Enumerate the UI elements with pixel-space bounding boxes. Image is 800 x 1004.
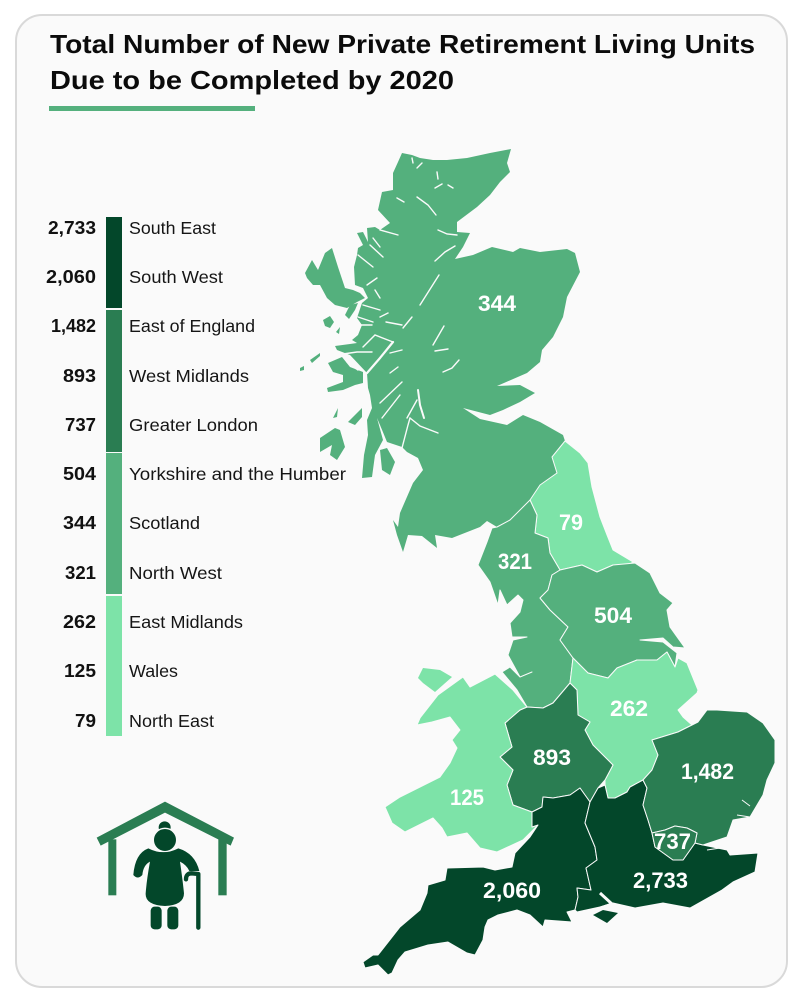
map values: 1,482	[681, 759, 734, 784]
map values: 737	[654, 829, 691, 854]
map region: East of England	[643, 710, 775, 845]
legend values: 125	[64, 661, 96, 681]
legend values: 893	[63, 366, 96, 386]
legend values: 321	[65, 563, 96, 583]
legend region names: Greater London	[129, 415, 258, 435]
map values: 504	[594, 603, 633, 628]
icon: woman with cane	[133, 821, 199, 929]
icon: roof and pillars	[97, 802, 234, 895]
Arran	[380, 448, 395, 475]
legend colour bar	[106, 217, 122, 736]
legend region names: Scotland	[129, 513, 200, 533]
Thames and east coast inlets	[707, 800, 750, 850]
Islay	[320, 428, 345, 460]
Skye	[305, 248, 365, 308]
legend region names	[129, 218, 346, 731]
Mull	[327, 357, 363, 392]
legend region names: Wales	[129, 661, 178, 681]
map region: South West	[363, 788, 597, 975]
legend values: 1,482	[51, 316, 96, 336]
map values: 2,060	[483, 878, 541, 903]
legend	[46, 217, 346, 736]
Jura	[348, 408, 362, 425]
Solent inlet	[592, 893, 612, 911]
map region: North East	[530, 441, 633, 572]
map values: 344	[478, 291, 517, 316]
legend values	[46, 218, 96, 731]
map region: South East	[575, 780, 758, 923]
title	[50, 29, 755, 95]
Scottish lochs	[343, 158, 459, 448]
legend values: 79	[75, 711, 96, 731]
map region: Scotland	[300, 149, 580, 552]
legend region names: North East	[129, 711, 214, 731]
map values: 2,733	[633, 868, 688, 893]
legend region names: South East	[129, 218, 216, 238]
legend values: 504	[63, 464, 96, 484]
legend region names: East Midlands	[129, 612, 243, 632]
legend region names: West Midlands	[129, 366, 249, 386]
map values: 893	[533, 745, 571, 770]
map region: Wales	[385, 668, 538, 852]
map region: North West	[478, 500, 573, 708]
map region: Yorkshire and the Humber	[540, 563, 685, 678]
legend values: 344	[63, 513, 96, 533]
map of Great Britain	[300, 149, 775, 975]
map values: 262	[610, 696, 648, 721]
map region: Greater London	[652, 826, 697, 860]
legend region names: East of England	[129, 316, 255, 336]
icon: elderly woman under a house roof	[97, 802, 234, 929]
legend values: 737	[65, 415, 96, 435]
legend values: 2,060	[46, 267, 96, 287]
map values: 79	[559, 510, 583, 535]
map values: 321	[498, 549, 532, 574]
legend region names: South West	[129, 267, 223, 287]
map region: West Midlands	[500, 683, 613, 812]
title: Total Number of New Private Retirement Living Units	[50, 29, 755, 59]
legend region names: Yorkshire and the Humber	[129, 464, 346, 484]
title: Due to be Completed by 2020	[50, 65, 454, 95]
map values	[450, 291, 734, 903]
legend region names: North West	[129, 563, 222, 583]
map region: East Midlands	[570, 652, 698, 798]
title underline	[49, 106, 255, 111]
legend values: 262	[63, 612, 96, 632]
legend values: 2,733	[48, 218, 96, 238]
map values: 125	[450, 785, 484, 810]
